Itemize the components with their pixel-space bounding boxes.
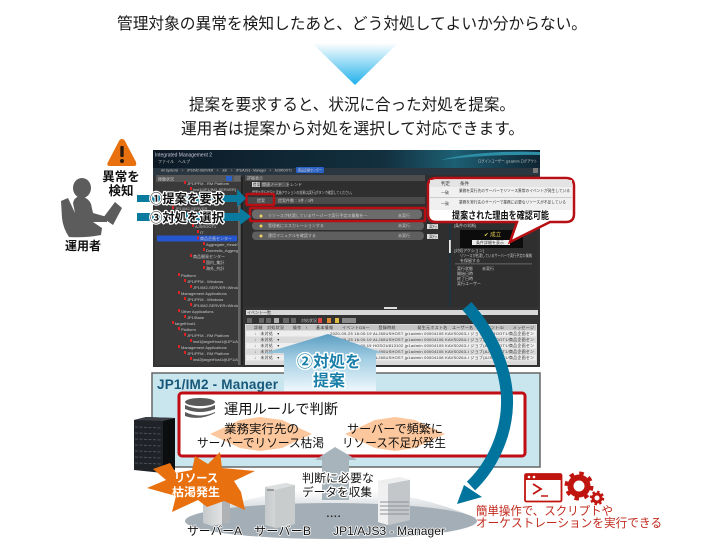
console tree panel: targetHost1	[175, 321, 196, 326]
console detail panel: 提案件数：3件 / 3件	[278, 197, 314, 203]
console event panel: イベント一覧	[247, 309, 271, 315]
heading: problem statement: 管理対象の異常を検知したあと、どう対処してよいか分からない。	[117, 15, 587, 33]
heading: judge by operation rules: 運用ルールで判断	[224, 401, 338, 417]
console tree panel: JP1/IM2-SERVER	[175, 206, 207, 211]
callout: resource exhausted burst	[147, 452, 255, 512]
console header: ファイル ヘルプ	[158, 158, 190, 164]
console detail panel: 実行状態	[457, 265, 473, 271]
icon: terminal window	[525, 474, 562, 502]
console tree panel	[155, 175, 247, 365]
arrow: data collection: データを収集	[302, 485, 373, 499]
console tree panel: 商品企画センター	[200, 235, 232, 241]
console breadcrumb: All Systems > JP1/IM2-SERVER > Job > JP1/AJS3 - Manager > AJSROOT1	[161, 168, 293, 172]
condition: resource exhausted: 業務実行先の	[224, 422, 299, 436]
console detail panel: 実行	[429, 233, 437, 239]
callout: resource exhausted burst: 枯渇発生	[172, 485, 220, 499]
console tree panel: JP1/Base	[187, 315, 205, 320]
console detail panel: [対処アクション]	[454, 247, 484, 253]
arrow: step 3 select: ③対処を選択	[150, 210, 224, 225]
console tree panel: Domestic_Aggregate	[206, 248, 244, 253]
console tree panel: 商品開発センター	[193, 253, 225, 259]
console detail panel: リソースが枯渇しているサーバーで実行予定の業務を一	[268, 212, 367, 218]
panel: management console screenshot	[153, 150, 540, 367]
condition: frequent shortage: サーバーで頻繁に	[347, 421, 443, 436]
console detail panel: 運用マニュアルを確認する	[268, 232, 316, 238]
icon: server A	[203, 497, 230, 526]
text block: solution summary: 運用者は提案から対処を選択して対応できます。	[181, 120, 524, 138]
console detail panel: 提案の実行状況と実施アクションの効果は[実行]ボタンで確認してください。	[252, 189, 354, 195]
console tree panel: JP1/AJS3	[193, 218, 211, 223]
label: server B: サーバーB	[254, 524, 311, 538]
console event panel	[245, 307, 538, 365]
text block: simple operation: 簡単操作で、スクリプトや	[476, 503, 613, 518]
label: anomaly detected: 異常を	[102, 169, 140, 184]
console tree panel: inst1[JP1/IM2-SERVER]	[193, 187, 236, 192]
console tree panel: Aggregate_HeadOffic	[206, 242, 244, 247]
callout: proposal reason: 判定	[441, 180, 450, 187]
console detail panel: 開始日時	[457, 270, 473, 276]
icon: warning triangle	[107, 139, 136, 166]
callout: proposal reason: 提案された理由を確認可能	[452, 209, 549, 222]
panel: operation rules	[179, 393, 525, 456]
label: operator: 運用者	[65, 238, 101, 253]
console tree panel: JP1/PFM - RM Platform	[187, 181, 230, 186]
icon: gears	[566, 474, 603, 504]
condition: resource exhausted: サーバーでリソース枯渇	[197, 435, 324, 450]
icon: operator at laptop	[61, 178, 122, 237]
label: anomaly detected: 検知	[108, 183, 134, 198]
callout: proposal reason: 業務を実行先のサーバーで業務に必要なリソースが不足している	[459, 198, 566, 204]
console breadcrumb: 商品企画センター	[298, 166, 322, 172]
icon: server B	[265, 483, 295, 528]
console tree panel: JP1/IM2-SERVER<Windows>	[193, 303, 247, 308]
console tree panel: Platform	[181, 327, 197, 332]
label: anomaly detected	[102, 169, 140, 198]
callout: resource exhausted burst: リソース	[174, 473, 218, 485]
callout: proposal reason: 一致	[441, 200, 449, 206]
panel: JP1/IM2 Manager	[152, 373, 540, 467]
console detail panel: 未実行	[398, 232, 410, 238]
callout: proposal reason: 一致	[441, 189, 449, 195]
label: server A: サーバーA	[187, 524, 242, 538]
callout: proposal reason: 業務を実行先のサーバーでリソース異常のイベントが発生している	[459, 187, 570, 193]
console detail panel: 詳細表示	[247, 174, 263, 180]
label: JP1/AJS3 Manager: JP1/AJS3 - Manager	[333, 524, 445, 538]
condition: frequent shortage: リソース不足が発生	[342, 435, 446, 450]
console header	[153, 150, 540, 168]
label: ellipsis: ....	[326, 509, 342, 520]
console detail panel: 実行	[429, 223, 437, 229]
console header: ログインユーザー: jp1admin ログアウト	[478, 158, 537, 164]
console tree panel: JP1/IM2-SERVER<Windows>	[193, 285, 247, 290]
console tree panel: Management Applications	[181, 345, 227, 350]
console detail panel: 実行ユーザー	[457, 280, 481, 286]
condition: resource exhausted	[197, 417, 324, 451]
console breadcrumb	[153, 166, 540, 177]
console detail panel: を保留する	[460, 257, 480, 263]
icon: database	[185, 398, 215, 418]
console tree panel: inst1[targetHost1@JP1/A15-3]	[193, 339, 247, 344]
text block: simple operation: オーケストレーションを実行できる	[476, 516, 662, 530]
text block: simple operation	[476, 503, 662, 530]
console tree panel: inst2[targetHost1@JP1/A15-3]	[193, 357, 247, 362]
condition: frequent shortage	[342, 417, 446, 451]
console tree panel: JP1/PFM - Windows	[187, 297, 223, 302]
console tree panel: JP1/PFM - RM Platform	[187, 351, 230, 356]
highlight: request button	[246, 194, 274, 205]
console detail panel: 提案	[257, 197, 265, 203]
console tree panel: 国内_集計	[206, 259, 224, 265]
console event panel: 対処状況	[301, 317, 317, 323]
console detail panel: 未実行	[482, 265, 494, 271]
icon: black server	[134, 417, 175, 473]
console event panel: ↓ 未対処 ▾ 2020-09-25 16:00:19 ALJ60USHOST jp1admin 00004105 KAVS0263-I ジョブ(AJSROOT1/商品企画セン	[254, 348, 534, 354]
arrow: data collection	[302, 447, 374, 500]
console event panel: ↓ 未対処 ▾ 2020-09-25 16:00:19 HOSOU813102 jp1admin 00004105 KAVS0263-I ジョブ(AJSROOT1/商品企画セン	[254, 342, 534, 348]
arrow: step 2 propose	[265, 334, 383, 391]
panel title: JP1/IM2 - Manager	[157, 377, 279, 392]
console detail panel	[244, 174, 538, 307]
console tree panel: JP1/PFM - RM Platform	[187, 333, 230, 338]
arrow: step 1 request	[137, 189, 246, 207]
arrow: step 2 propose: ②対処を	[297, 353, 361, 371]
console detail panel: 未実行	[398, 212, 410, 218]
console detail panel: ✔ 成立	[484, 230, 502, 238]
console tree panel: AJSROOT1	[195, 224, 217, 229]
console tree panel: 稼働状況	[158, 176, 174, 182]
callout: proposal reason: 条件	[460, 180, 469, 187]
arrow: down triangle	[312, 43, 398, 85]
console tree panel: JP1/PFM - Windows	[187, 279, 223, 284]
arrow: execute action curved	[457, 306, 507, 504]
arrow: data collection: 判断に必要な	[302, 472, 374, 485]
console detail panel: 終了日時	[457, 275, 473, 281]
console detail panel: 条件詳細を表示	[476, 239, 504, 245]
text block: solution summary: 提案を要求すると、状況に合った対処を提案。	[189, 96, 515, 114]
console event panel: ↓ 未対処 ▾ 2020-09-25 16:00:19 ALJ60USHOST jp1admin 00004108 KAVS0264-I ジョブ(AJSROOT1/商品企画セン	[254, 354, 534, 360]
console event panel: ↓ 未対処 ▾ 2020-09-25 16:00:19 ALJ60USHOST jp1admin 00004105 KAVS0263-I ジョブ(AJSROOT1/商品企画セン	[254, 330, 534, 336]
console event panel: ↓ 未対処 ▾ 2020-09-25 16:00:19 ALJ60USHOST jp1admin 00004106 KAVS0264-I ジョブ(AJSROOT1/商品企画セン	[254, 336, 534, 342]
console detail panel: [条件の判断]	[454, 222, 476, 228]
callout: proposal reason	[428, 178, 574, 242]
console tree panel: IT	[200, 230, 204, 235]
console tree panel: Management Applications	[181, 291, 227, 296]
console tree panel: Other Applications	[181, 309, 213, 314]
icon: JP1/AJS3 server	[378, 477, 410, 525]
console detail panel: 管理者にエスカレーションする	[268, 222, 324, 228]
console detail panel: リソースが枯渇しているサーバーで実行予定の業務	[460, 252, 532, 258]
console detail panel: 未実行	[398, 222, 410, 228]
console detail panel: 提案	[252, 181, 260, 187]
base ellipse	[185, 490, 477, 539]
highlight: selected action row	[250, 208, 425, 221]
console tree panel: 海外_共計	[206, 265, 224, 271]
console header: Integrated Management 2	[155, 152, 212, 158]
arrow: step 3 select	[137, 208, 251, 225]
console detail panel: 関連ノード トレンド	[262, 181, 302, 187]
console tree panel: Platform	[181, 273, 197, 278]
text block: solution summary	[181, 96, 524, 138]
arrow: step 1 request: ①提案を要求	[150, 191, 224, 206]
group: monitored servers	[185, 477, 477, 539]
arrow: step 2 propose: 提案	[313, 372, 345, 390]
console event panel: 詳細 対処状況 操作 ! 基本情報 イベントDB一 登録時刻 発生元ホスト名 ユーザー名 イベントID メッセージ	[254, 324, 534, 330]
